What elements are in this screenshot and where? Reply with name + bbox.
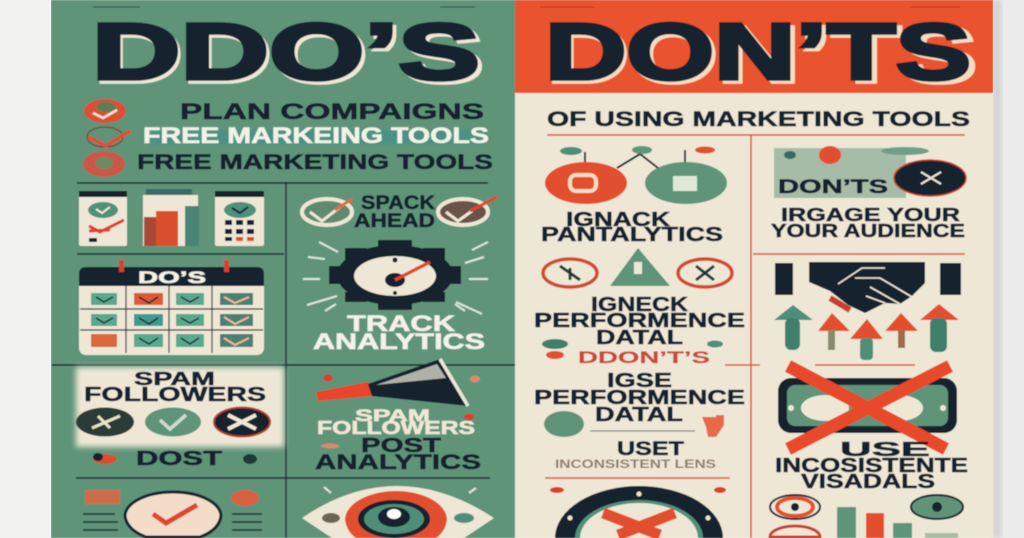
text: use incosistente visadals: USE: [840, 439, 930, 461]
icon: warning badges: [543, 248, 732, 287]
panel: don'ts mini image: [774, 146, 966, 198]
heading: DON'TS: DON’TS: [547, 10, 977, 99]
panel: don'ts orange header: [515, 0, 993, 93]
text: igse performence datal: PERFORMENCE: [534, 387, 745, 409]
icon: gear clock: [329, 240, 461, 310]
icon: red check badge: [84, 99, 126, 123]
text: use incosistente visadals: [775, 439, 968, 493]
heading: DON'TS: DON’TS: [545, 7, 971, 96]
icon: right list: [231, 490, 262, 530]
text: spam followers cream: [317, 406, 475, 438]
calendar title: DO’S: [138, 268, 206, 287]
text: igneck performence datal: DATAL: [596, 327, 683, 349]
text: post analytics: POST: [361, 435, 441, 457]
panel: don'ts cream column: [515, 93, 993, 538]
do's intro list: [83, 99, 493, 177]
icon: small ovals: [542, 339, 723, 359]
text: irgage your audience: YOUR AUDIENCE: [771, 221, 965, 241]
text: followers: FOLLOWERS: [84, 384, 266, 406]
icon: check clock: [125, 492, 221, 537]
text: use incosistente visadals: INCOSISTENTE: [775, 455, 968, 477]
text: track analytics: ANALYTICS: [313, 329, 485, 354]
text: igneck performence datal: [534, 294, 745, 349]
icon: crossed clock: [550, 486, 726, 538]
text: spack ahead: AHEAD: [354, 211, 435, 232]
icon: bar chart card: [143, 189, 199, 246]
icon: red green badge: [83, 151, 125, 177]
icon: bottom badges: [770, 495, 963, 537]
icon: red cross badge: [214, 408, 270, 436]
icon: small dark red marks: [93, 453, 257, 464]
panel: do's green column: [51, 0, 515, 538]
text: spam followers cream: FOLLOWERS: [317, 418, 475, 438]
text: uset: USET: [617, 439, 685, 460]
text: post analytics: [315, 435, 481, 474]
text: dost: DOST: [136, 448, 222, 470]
icon: dark clock: [894, 160, 966, 196]
text: red don'ts: DDON’T’S: [578, 348, 710, 367]
icon: check right: [438, 197, 497, 225]
text: spack ahead: [354, 193, 435, 232]
text: igneck performence datal: IGNECK: [591, 294, 689, 316]
text: use incosistente visadals: VISADALS: [801, 471, 935, 493]
text: spam followers cream: SPAM: [355, 406, 430, 425]
icon: up arrows: [774, 304, 959, 360]
heading: DDO'S: [92, 7, 484, 99]
text: ignack pantalytics: IGNACK: [566, 209, 671, 231]
text: ignack pantalytics: PANTALYTICS: [541, 224, 723, 246]
icon: keypad card: [215, 191, 264, 246]
heading: DDO'S: DDO’S: [94, 10, 484, 99]
text: plan compaigns: PLAN COMPAIGNS: [180, 99, 484, 124]
icon: green check badge: [145, 408, 201, 436]
text: track analytics: TRACK: [347, 311, 455, 336]
icon: crossed banknote: [778, 366, 957, 449]
text: irgage your audience: [771, 205, 965, 241]
heading: DDO'S: DDO’S: [92, 7, 480, 96]
text: free markeing tools: FREE MARKEING TOOLS: [143, 123, 489, 148]
icon: checklist card: [79, 191, 127, 246]
text: faded inconsistent: INCONSISTENT LENS: [555, 457, 716, 471]
icon: left list: [83, 490, 120, 530]
text: free marketing tools: FREE MARKETING TOOLS: [137, 151, 493, 174]
text: track analytics: [313, 311, 485, 354]
icon: dark cross badge: [76, 408, 134, 436]
icon: teal and red blobs: [544, 411, 724, 437]
icon: handshake: [775, 262, 961, 313]
icon: megaphone: [316, 359, 480, 448]
icon: outline check: [87, 127, 130, 147]
icon: linked circles: [545, 146, 727, 204]
calendar: [79, 260, 264, 355]
text: don'ts: DON’TS: [778, 177, 888, 198]
text: spack ahead: SPACK: [361, 193, 435, 214]
heading: DON'TS: [545, 7, 977, 99]
text: igse performence datal: DATAL: [595, 404, 683, 426]
text: spam: SPAM: [134, 369, 215, 389]
text: post analytics: ANALYTICS: [315, 451, 481, 474]
text: irgage your audience: IRGAGE YOUR: [781, 205, 960, 225]
icon: check left: [302, 199, 352, 225]
panel: spam followers: [76, 367, 284, 447]
icon: eye: [302, 486, 494, 538]
text: igse performence datal: [534, 370, 745, 426]
text: igse performence datal: IGSE: [607, 370, 672, 392]
text: igneck performence datal: PERFORMENCE: [534, 310, 745, 332]
decorative rays: [303, 242, 488, 314]
bar chart: [837, 507, 958, 538]
text: ignack pantalytics: [541, 209, 723, 246]
text: of using marketing tools: OF USING MARKETING TOOLS: [547, 108, 970, 131]
